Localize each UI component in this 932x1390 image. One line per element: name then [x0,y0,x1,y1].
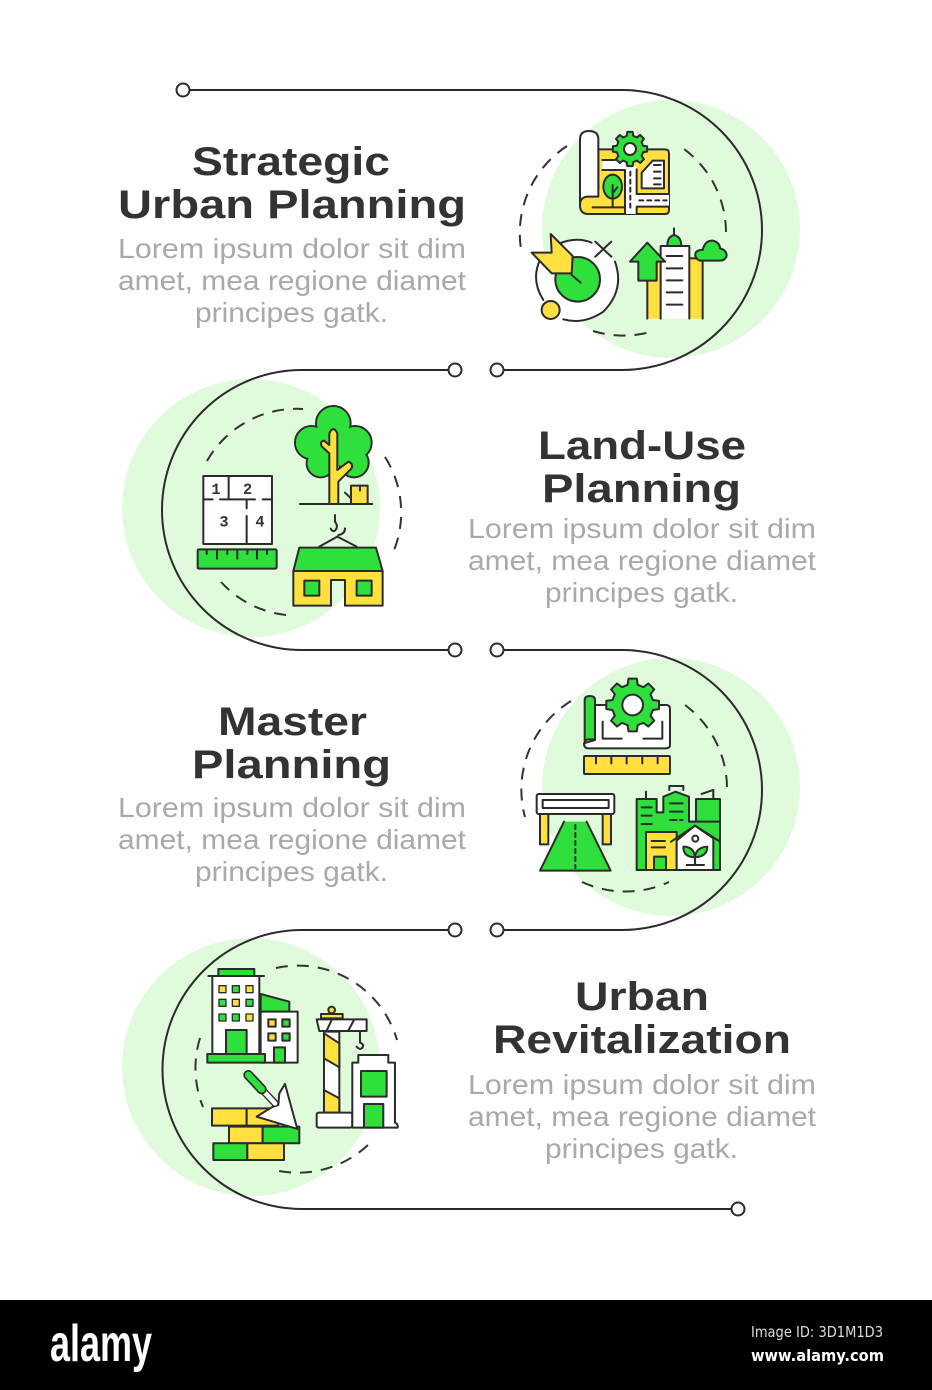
icon: bricks and trowel [212,1075,299,1160]
dashed ring [195,966,397,1173]
icon: floor plan with ruler: 3 [219,514,229,532]
heading: Strategic Urban Planning: Strategic [192,140,390,184]
icon: house on crane hook [293,515,383,606]
heading: Land-Use Planning [538,424,746,511]
body text: principes gatk. [195,856,388,887]
icon group [198,406,383,606]
icon: floor plan with ruler: 4 [255,514,265,532]
heading: Master Planning [192,700,391,787]
panel: Strategic Urban Planning text [118,140,466,328]
heading: Strategic Urban Planning: Urban Planning [118,183,466,227]
body text: Lorem ipsum dolor sit dim [118,233,466,264]
icon group [537,679,720,871]
dashed ring [520,146,726,336]
heading: Urban Revitalization [493,975,791,1062]
body text: Lorem ipsum dolor sit dim [118,792,466,823]
footer image id: Image ID: 3D1M1D3 [751,1323,883,1341]
body text [468,513,816,608]
body text [118,792,466,887]
timeline connector: step 2 [162,364,462,656]
panel: Master Planning icons [521,679,727,892]
dashed ring [207,409,401,615]
icon: crane and new building [317,1007,398,1128]
background circle: step 1 [542,100,800,358]
icon: target with arrow [532,234,618,321]
heading: Land-Use Planning: Land-Use [538,424,746,468]
icon: city with greenhouse [637,786,720,870]
body text: Lorem ipsum dolor sit dim [468,1069,816,1100]
icon: floor plan with ruler: 2 [243,481,252,499]
icon: city map with gear [580,131,669,214]
icon: blueprint with gear and ruler [584,679,670,774]
body text: amet, mea regione diamet [118,824,466,855]
panel: Master Planning text [118,700,466,887]
background circle: step 3 [542,658,800,916]
icon: damaged buildings [207,969,298,1063]
timeline connector: step 3 [490,644,762,936]
body text [468,1069,816,1164]
footer band [0,1300,932,1390]
footer logo: alamy: alamy [50,1315,152,1373]
heading: Land-Use Planning: Planning [542,467,741,511]
body text: principes gatk. [545,577,738,608]
panel: Land-Use Planning icons [198,406,401,615]
heading: Master Planning: Master [218,700,367,744]
body text [118,233,466,328]
icon group [532,131,727,321]
body text: principes gatk. [195,297,388,328]
panel: Strategic Urban Planning icons [520,131,727,336]
panel: Urban Revitalization text [468,975,816,1164]
footer url: www.alamy.com [751,1346,884,1365]
icon group [207,969,398,1160]
body text: amet, mea regione diamet [468,545,816,576]
icon: road under gate [537,794,614,871]
timeline connector: step 1 [176,84,762,376]
heading: Urban Revitalization: Revitalization [493,1018,791,1062]
dashed ring [521,701,727,892]
panel: Urban Revitalization icons [195,966,398,1173]
icon: tree and stump [295,406,372,504]
body text: Lorem ipsum dolor sit dim [468,513,816,544]
background circle: step 4 [122,938,380,1196]
heading: Strategic Urban Planning [118,140,466,227]
icon: rising building with arrow and cloud [630,228,727,319]
heading: Urban Revitalization: Urban [575,975,709,1019]
body text: amet, mea regione diamet [118,265,466,296]
icon: floor plan with ruler [198,476,277,569]
background circle: step 2 [122,379,380,637]
heading: Master Planning: Planning [192,743,391,787]
icon: floor plan with ruler: 1 [211,481,221,499]
body text: amet, mea regione diamet [468,1101,816,1132]
panel: Land-Use Planning text [468,424,816,608]
body text: principes gatk. [545,1133,738,1164]
timeline connector: step 4 [162,924,744,1216]
